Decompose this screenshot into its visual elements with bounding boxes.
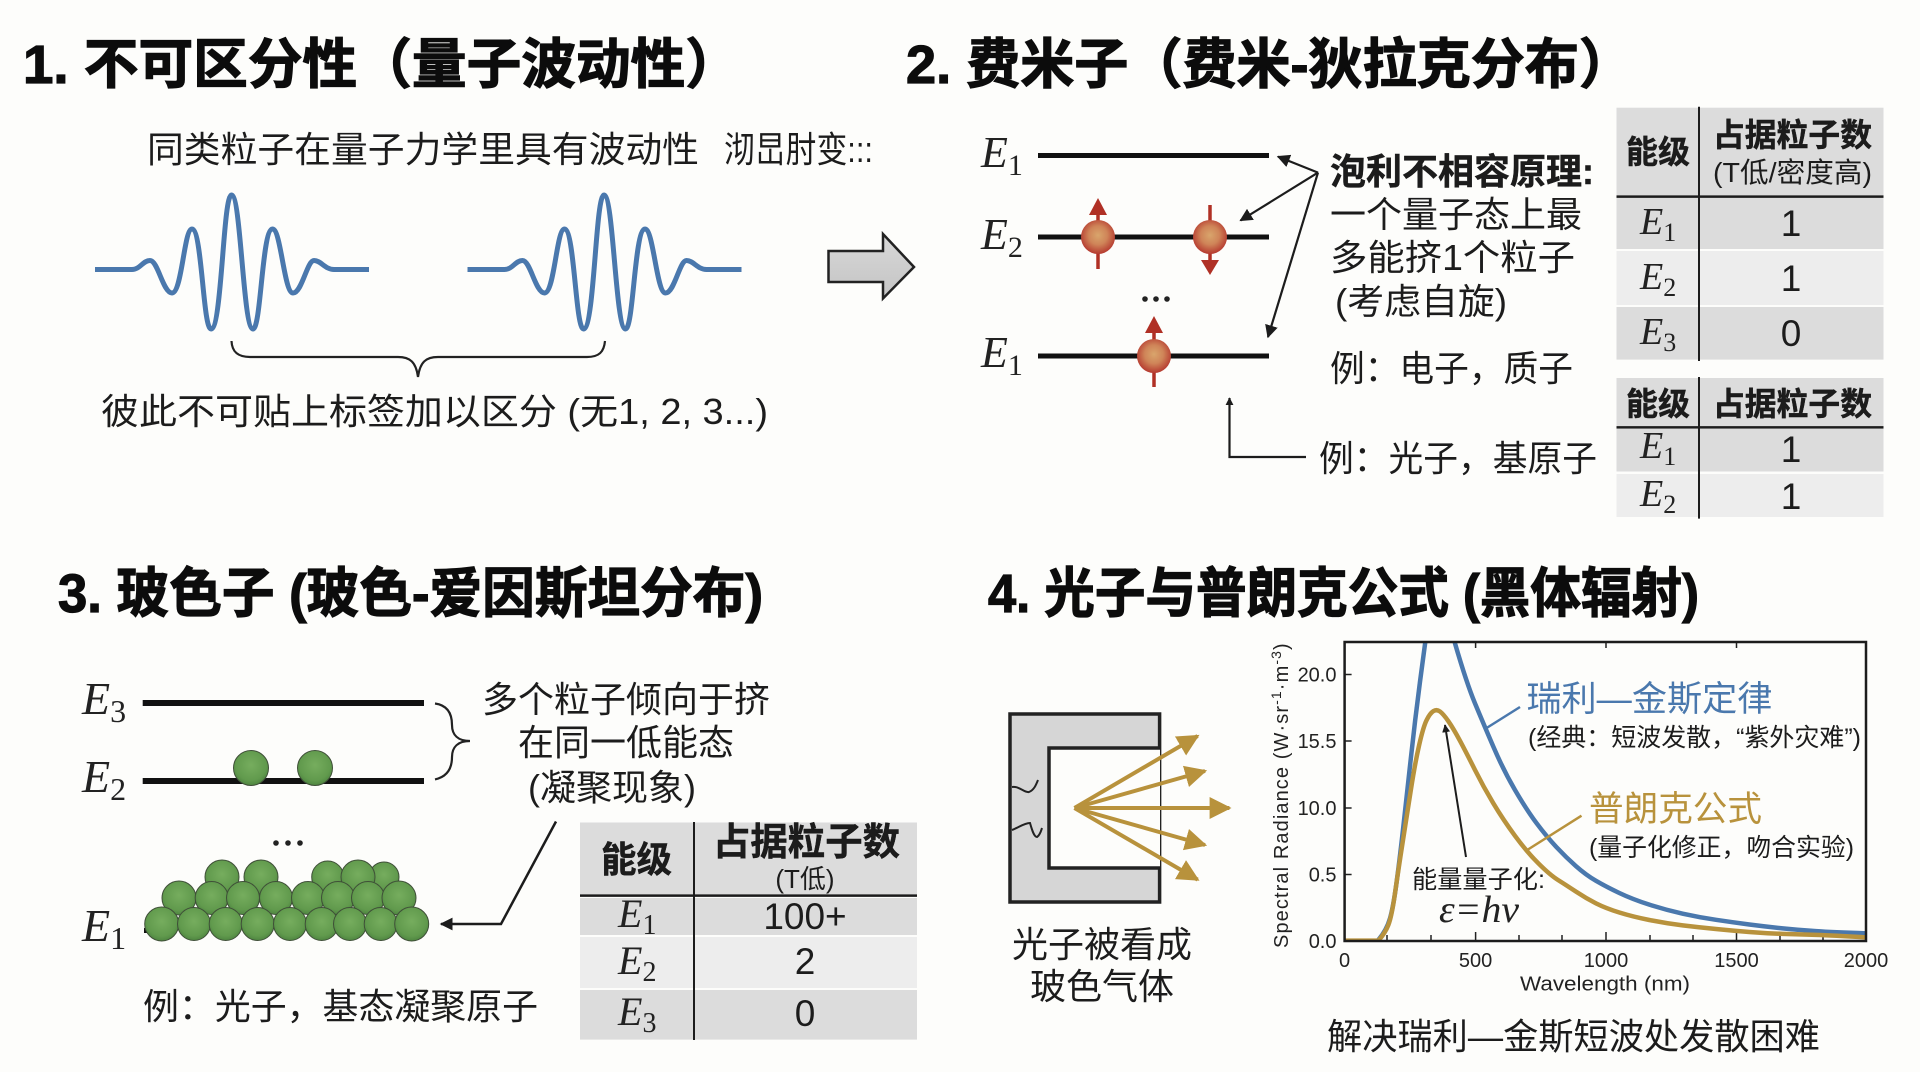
energy level diagram: 2 bbox=[1008, 231, 1023, 264]
table: fermion occupancy: 占据粒子数 bbox=[1713, 117, 1872, 153]
text: wave nature: 同类粒子在量子力学里具有波动性 bbox=[147, 129, 699, 170]
energy level diagram bbox=[980, 128, 1269, 387]
wave packet right bbox=[468, 195, 742, 329]
table: boson occupancy: 1 bbox=[1781, 476, 1801, 517]
heading 4: 4. 光子与普朗克公式 (黑体辐射) bbox=[988, 564, 1699, 624]
energy level diagram with particles: E bbox=[82, 673, 110, 724]
callout: Planck: (量子化修正，吻合实验) bbox=[1589, 834, 1854, 862]
energy level diagram: E bbox=[981, 128, 1008, 177]
arrow to next panel bbox=[828, 234, 914, 298]
text: condensation: (凝聚现象) bbox=[528, 767, 696, 808]
callout: Rayleigh-Jeans: (经典：短波发散，“紫外灾难”) bbox=[1528, 724, 1861, 752]
table: boson distribution: E bbox=[618, 989, 642, 1034]
caption: resolves divergence: 解决瑞利—金斯短波处发散困难 bbox=[1327, 1016, 1820, 1057]
table: fermion occupancy: 1 bbox=[1781, 258, 1801, 299]
caption: photon gas: 玻色气体 bbox=[1030, 966, 1174, 1007]
energy level diagram with particles: 2 bbox=[110, 771, 126, 807]
callout: energy quantization: ε=hν bbox=[1439, 889, 1519, 931]
heading 1: 1. 不可区分性（量子波动性） bbox=[23, 35, 740, 95]
table: fermion occupancy: 2 bbox=[1663, 273, 1676, 302]
energy level diagram with particles bbox=[81, 673, 429, 956]
table: boson occupancy: E bbox=[1640, 425, 1663, 467]
axis labels: 0.0 bbox=[1309, 931, 1336, 953]
axis labels: 0.5 bbox=[1309, 864, 1336, 886]
panel 1: indistinguishability bbox=[23, 35, 914, 432]
table: boson distribution: 100+ bbox=[763, 896, 847, 937]
heading 2: 2. 费米子（费米-狄拉克分布） bbox=[906, 35, 1633, 95]
table: boson occupancy: 1 bbox=[1781, 429, 1801, 470]
table: fermion occupancy: 能级 bbox=[1626, 134, 1690, 170]
blackbody cavity icon bbox=[1010, 714, 1160, 902]
axis labels: Spectral Radiance (W·sr bbox=[1271, 705, 1293, 948]
table: boson distribution: E bbox=[618, 938, 642, 983]
table: fermion occupancy: E bbox=[1640, 256, 1663, 298]
text: no labels: 彼此不可贴上标签加以区分 (无1, 2, 3...) bbox=[101, 391, 768, 432]
table: boson occupancy: 占据粒子数 bbox=[1713, 386, 1872, 422]
curve: Planck formula bbox=[1345, 710, 1866, 941]
emission arrows bbox=[1074, 736, 1229, 880]
axis labels: -3 bbox=[1268, 650, 1284, 665]
text: boson example: 例：光子，基态凝聚原子 bbox=[143, 986, 538, 1027]
callout: energy quantization: 能量量子化: bbox=[1412, 866, 1545, 894]
brace right of levels bbox=[435, 704, 470, 779]
table: boson occupancy: 2 bbox=[1663, 490, 1676, 519]
table: fermion occupancy: 0 bbox=[1781, 313, 1801, 354]
table: boson occupancy: 1 bbox=[1663, 442, 1676, 471]
panel 3: bosons bbox=[58, 564, 917, 1040]
Pauli exclusion text: 多能挤1个粒子 bbox=[1330, 237, 1575, 278]
energy level diagram: 1 bbox=[1008, 349, 1023, 382]
axis labels: 20.0 bbox=[1298, 664, 1336, 686]
brace under waves bbox=[232, 341, 605, 377]
Pauli exclusion text: 一个量子态上最 bbox=[1330, 194, 1582, 235]
table: fermion occupancy: E bbox=[1640, 201, 1663, 243]
chart: spectral radiance bbox=[1268, 627, 1888, 996]
table: boson distribution: 2 bbox=[642, 957, 656, 988]
table: fermion occupancy: (T低/密度高) bbox=[1713, 157, 1872, 188]
text: garbled trailing phrase: 沏旵肘变::: bbox=[724, 129, 873, 170]
table: boson distribution: 占据粒子数 bbox=[713, 822, 900, 864]
table: fermion occupancy bbox=[1616, 107, 1884, 361]
Pauli exclusion text: 例：电子，质子 bbox=[1330, 348, 1573, 389]
axis labels: Wavelength (nm) bbox=[1520, 974, 1690, 996]
table: fermion occupancy: E bbox=[1640, 311, 1663, 353]
plot curves bbox=[1345, 627, 1866, 941]
text: condensation: 在同一低能态 bbox=[518, 722, 734, 763]
table: boson occupancy: E bbox=[1640, 473, 1663, 515]
table: boson distribution: E bbox=[618, 891, 642, 936]
axis labels: 1500 bbox=[1714, 950, 1759, 972]
axis labels: ) bbox=[1271, 642, 1293, 650]
table: fermion occupancy: 1 bbox=[1663, 218, 1676, 247]
caption: photon gas bbox=[1012, 924, 1192, 1007]
arrow to ground state bbox=[441, 822, 556, 924]
chart frame bbox=[1345, 642, 1866, 941]
wave packet left bbox=[95, 195, 369, 329]
arrows from Pauli text bbox=[1230, 157, 1318, 457]
text: photon example: 例：光子，基原子 bbox=[1319, 438, 1597, 479]
axis labels: 0 bbox=[1339, 950, 1350, 972]
Pauli exclusion text bbox=[1330, 151, 1594, 389]
text: condensation bbox=[482, 679, 770, 808]
callout: Planck: 普朗克公式 bbox=[1589, 790, 1762, 829]
axis labels: ·m bbox=[1271, 665, 1293, 690]
callout: Planck bbox=[1526, 790, 1854, 862]
table: boson distribution bbox=[580, 822, 917, 1040]
axis labels: 15.5 bbox=[1298, 731, 1336, 753]
energy level diagram: E bbox=[981, 210, 1008, 259]
energy level diagram: 1 bbox=[1008, 149, 1023, 182]
energy level diagram with particles: E bbox=[82, 900, 110, 951]
energy level diagram with particles: 1 bbox=[110, 920, 126, 956]
curve: Rayleigh-Jeans law bbox=[1378, 627, 1866, 940]
table: fermion occupancy: 1 bbox=[1781, 203, 1801, 244]
heading 3: 3. 玻色子 (玻色-爱因斯坦分布) bbox=[58, 564, 763, 624]
table: boson distribution: (T低) bbox=[775, 864, 835, 894]
text: condensation: 多个粒子倾向于挤 bbox=[482, 679, 770, 720]
table: boson occupancy bbox=[1616, 377, 1884, 519]
axis labels: 2000 bbox=[1844, 950, 1888, 972]
axis labels: 10.0 bbox=[1298, 798, 1336, 820]
table: fermion occupancy: 3 bbox=[1663, 328, 1676, 357]
Pauli exclusion text: 泡利不相容原理: bbox=[1330, 151, 1594, 192]
axis labels: 1000 bbox=[1584, 950, 1628, 972]
axis labels: -1 bbox=[1268, 690, 1284, 705]
energy level diagram with particles: 3 bbox=[110, 693, 126, 729]
panel 4: photons and Planck bbox=[988, 564, 1888, 1057]
table: boson distribution: 2 bbox=[795, 941, 815, 982]
caption: photon gas: 光子被看成 bbox=[1012, 924, 1192, 965]
panel 2: fermions bbox=[906, 35, 1884, 519]
table: boson occupancy: 能级 bbox=[1626, 386, 1690, 422]
axis labels: 500 bbox=[1459, 950, 1492, 972]
table: boson distribution: 能级 bbox=[601, 839, 672, 880]
energy level diagram with particles: E bbox=[82, 751, 110, 802]
table: boson distribution: 1 bbox=[642, 910, 656, 941]
table: boson distribution: 0 bbox=[795, 993, 815, 1034]
Pauli exclusion text: (考虑自旋) bbox=[1335, 281, 1507, 322]
energy level diagram: E bbox=[981, 328, 1008, 377]
axis labels bbox=[1268, 642, 1888, 996]
table: boson distribution: 3 bbox=[642, 1008, 656, 1039]
callout: energy quantization bbox=[1412, 725, 1545, 931]
callout: Rayleigh-Jeans bbox=[1485, 680, 1861, 752]
callout: Rayleigh-Jeans: 瑞利—金斯定律 bbox=[1526, 680, 1772, 719]
